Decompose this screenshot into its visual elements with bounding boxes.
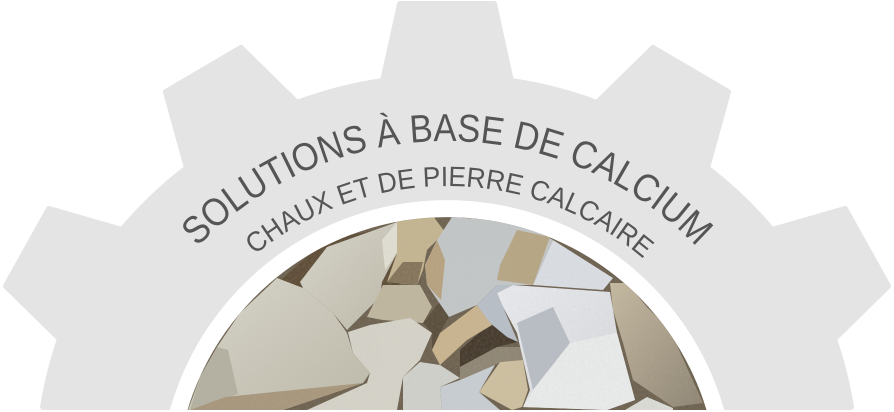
heading: curved title: SOLUTIONS À BASE DE CALCIUM [183,112,714,245]
white ring around photo [170,200,724,410]
photo: limestone rocks [188,217,706,410]
subheading: curved subtitle: CHAUX ET DE PIERRE CALCAIRE [247,166,654,258]
